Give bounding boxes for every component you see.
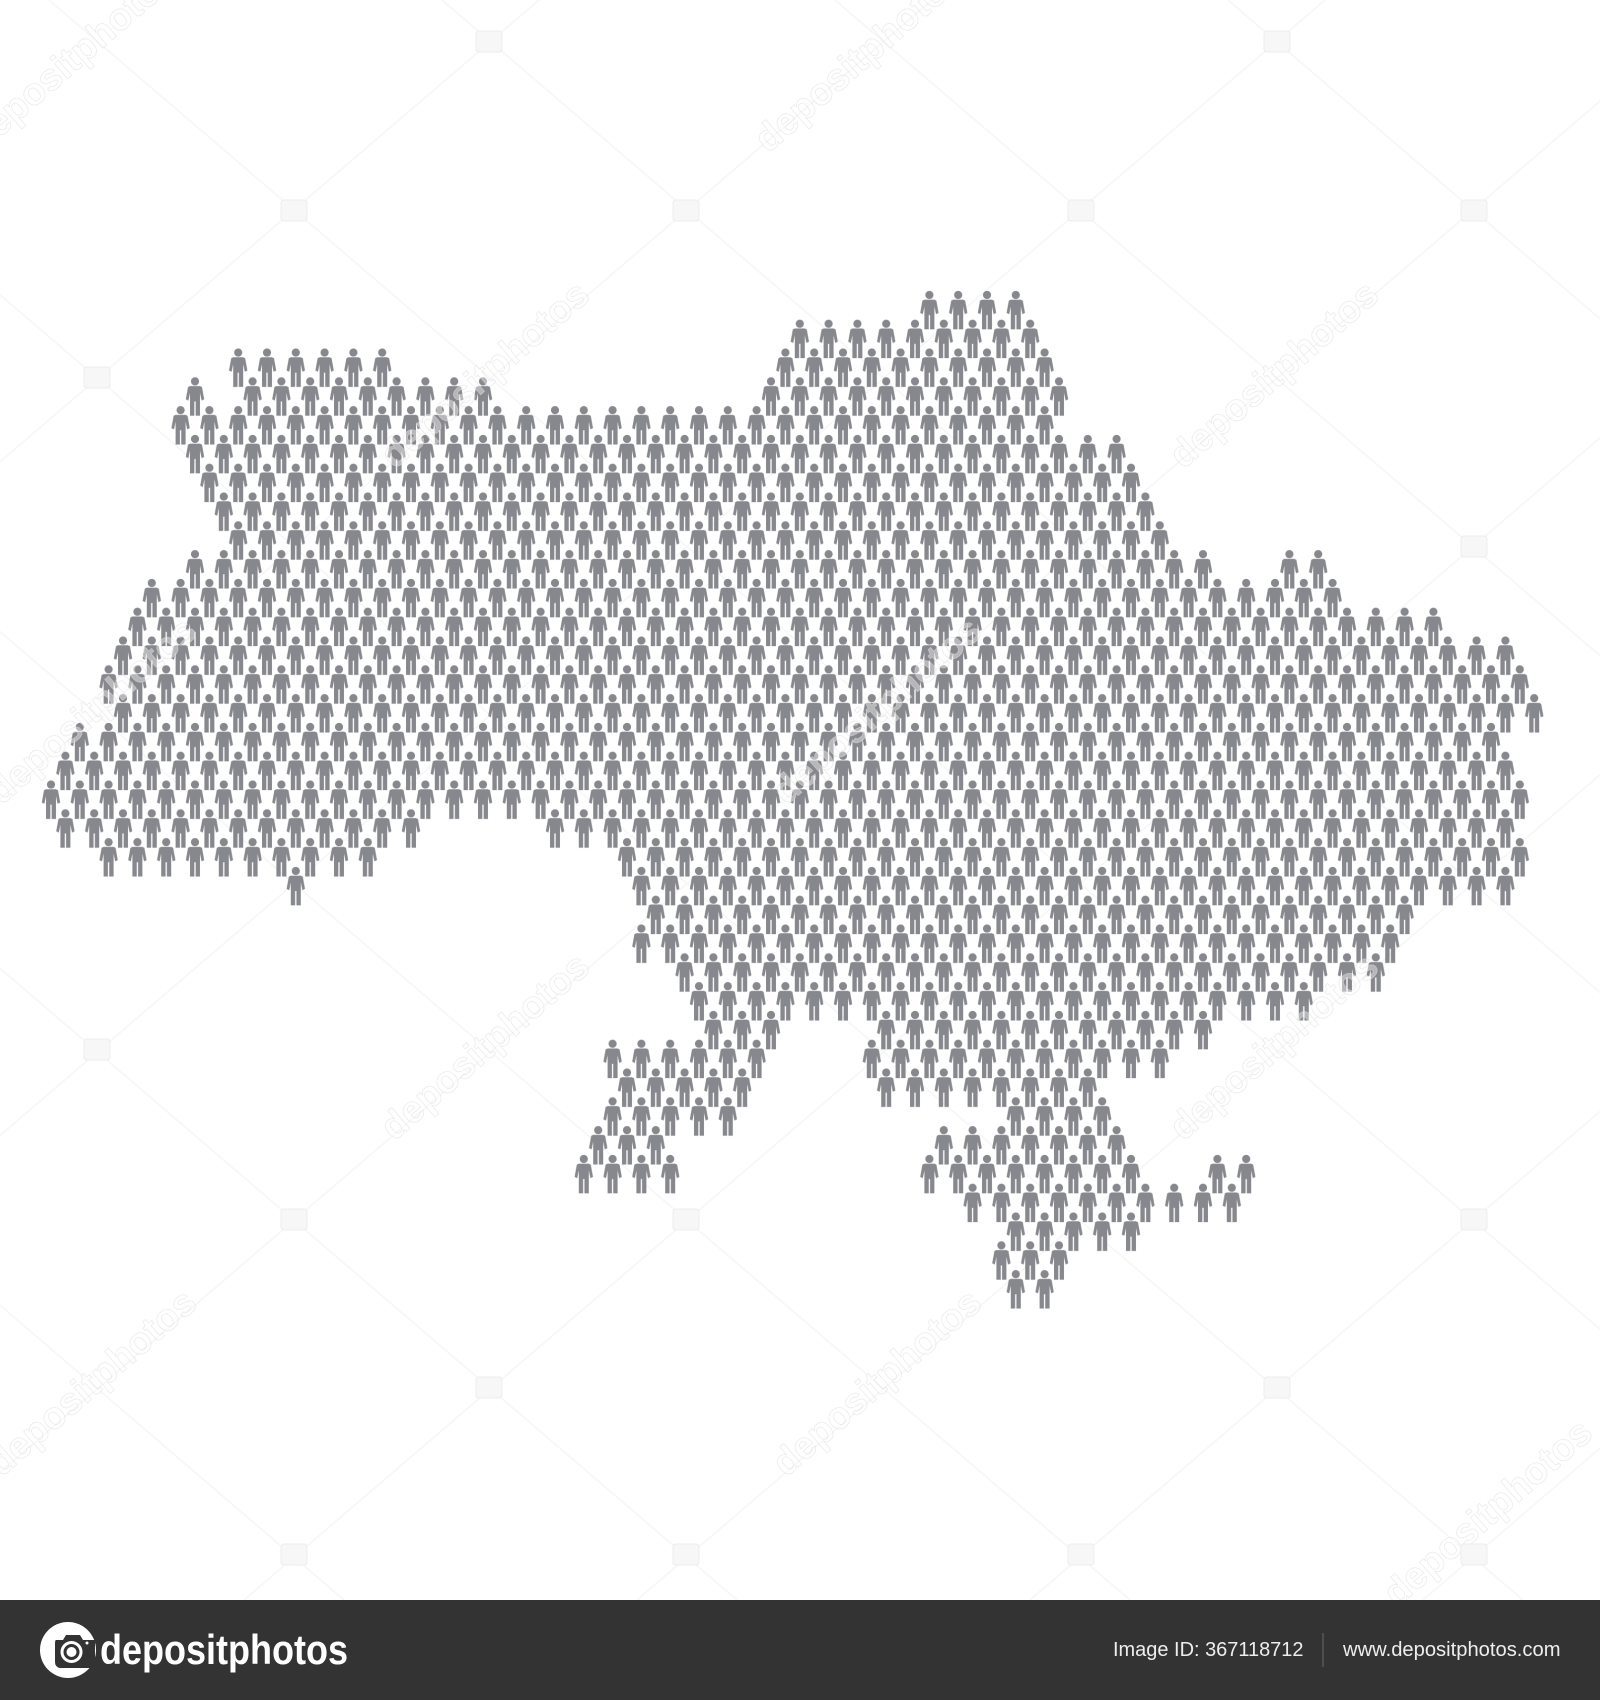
map of Ukraine made of people icons xyxy=(37,287,1549,1309)
mainland and Crimea rows of people, odd rows xyxy=(37,316,1534,1280)
watermark camera marks xyxy=(84,31,1487,1565)
icon: depositphotos camera logo xyxy=(40,1622,96,1678)
image id: Image ID: 367118712 xyxy=(1113,1639,1304,1661)
watermark text: depositphotos xyxy=(765,1281,990,1485)
mainland and Crimea rows of people, even rows xyxy=(51,287,1549,1309)
watermark text: depositphotos xyxy=(1162,273,1387,477)
footer bar xyxy=(0,1600,1600,1700)
watermark text: depositphotos xyxy=(373,945,598,1149)
watermark text: depositphotos xyxy=(373,273,598,477)
watermark text: depositphotos xyxy=(765,609,990,813)
website url: www.depositphotos.com xyxy=(1342,1639,1560,1661)
watermark text: depositphotos xyxy=(1376,1411,1600,1615)
logo wordmark: depositphotos xyxy=(100,1626,348,1673)
watermark text: depositphotos xyxy=(1162,945,1387,1149)
